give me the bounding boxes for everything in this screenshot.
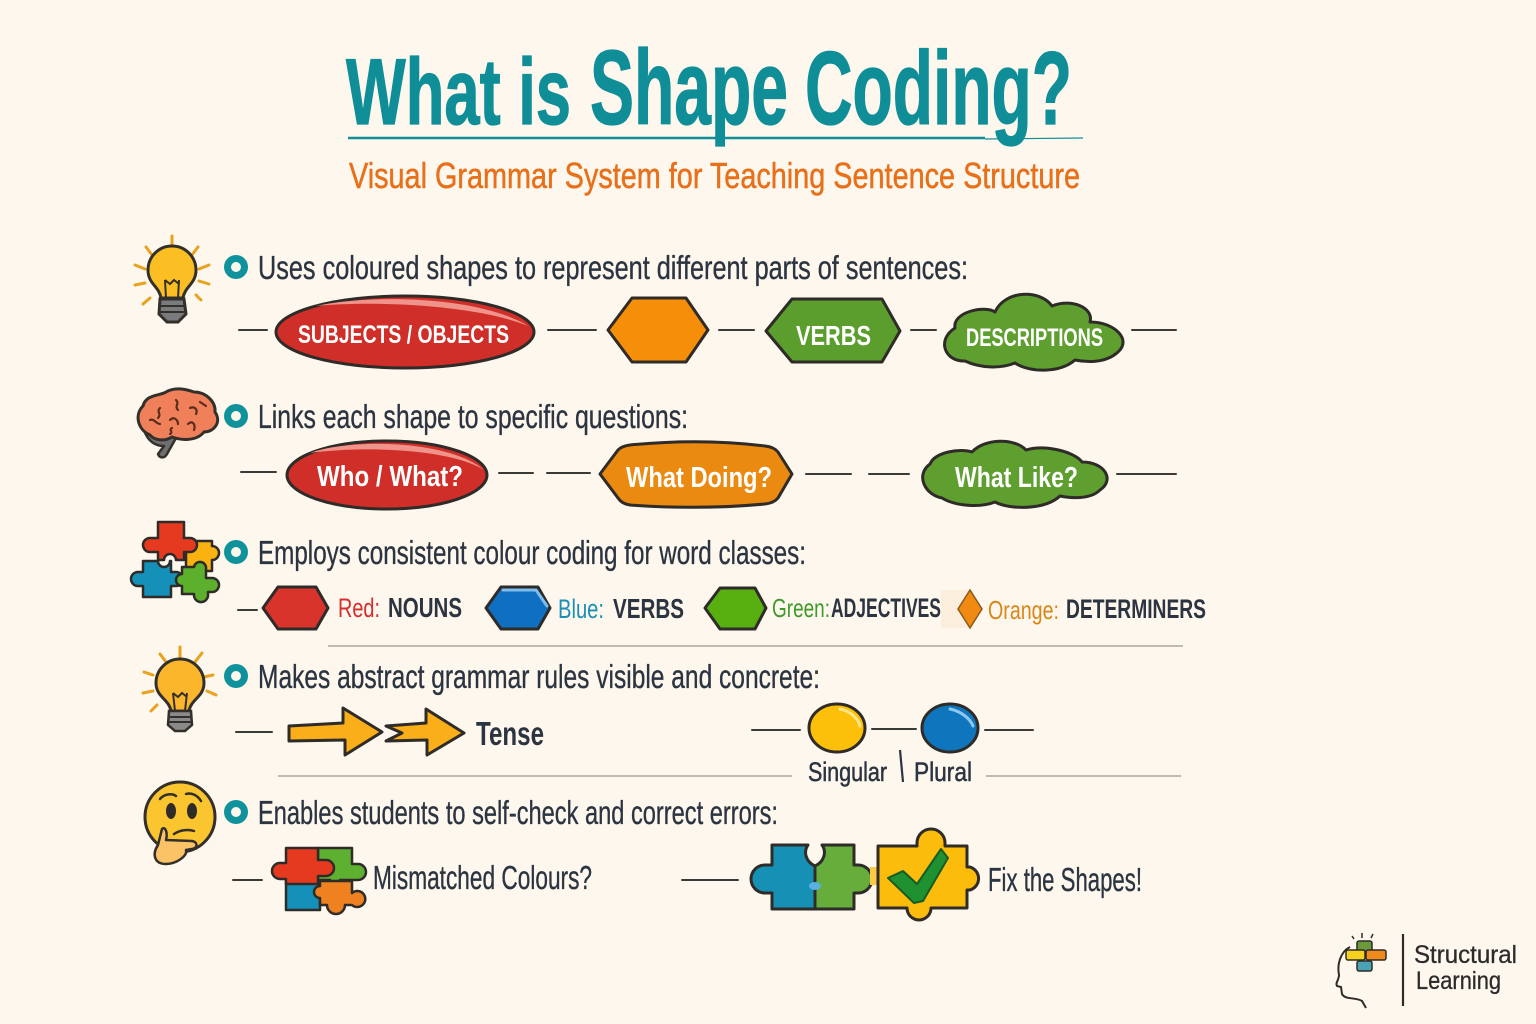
shape: what doing rounded hexagon [600,442,792,507]
panel: row 1 coloured shapes [135,236,1176,370]
legend: red nouns: Red: [338,593,380,623]
shape: verbs hexagon: VERBS [796,320,871,351]
shape: who / what oval: Who / What? [317,461,463,493]
title: Shape [590,29,788,147]
shape: descriptions cloud: DESCRIPTIONS [966,324,1103,352]
text: row 3 statement: Employs consistent colour coding for word classes: [258,534,806,571]
text: row 1 statement: Uses coloured shapes to represent different parts of sentences: [258,249,968,286]
panel: row 2 questions [138,389,1176,509]
shape: orange hexagon [608,298,708,362]
shape: what like cloud [923,441,1107,507]
title [346,29,1083,147]
text: singular and plural: Plural [914,757,972,787]
panel: row 3 colour coding [131,522,1206,646]
legend: green adjectives: Green: [772,593,830,623]
panel: row 5 self-check [145,782,1142,920]
shape: what doing rounded hexagon: What Doing? [626,462,772,494]
singular circle [809,704,865,752]
logo: Structural Learning [1336,933,1517,1008]
plural circle [922,704,978,752]
legend: blue verbs: VERBS [613,593,684,624]
logo: Structural Learning: Structural [1414,941,1517,969]
subtitle: Visual Grammar System for Teaching Sentence Structure [349,155,1080,196]
icon: yellow jigsaw with check mark [870,829,979,920]
shape: what like cloud: What Like? [955,462,1078,494]
text: tense: Tense [476,715,544,752]
icon: mismatched jigsaw [272,848,366,914]
icon: brain [138,389,218,457]
shape: descriptions cloud [945,294,1123,370]
legend: green adjectives: ADJECTIVES [831,593,941,623]
text: row 2 statement: Links each shape to specific questions: [258,398,688,435]
bullet [224,540,248,564]
panel: row 4 abstract rules [143,647,1181,787]
legend: orange determiners: DETERMINERS [1066,594,1206,624]
bullet [224,664,248,688]
title: What is [346,39,571,144]
text: singular and plural [808,750,972,787]
shape: subjects / objects oval: SUBJECTS / OBJECTS [298,321,509,349]
title: Coding? [805,31,1072,147]
text: singular and plural: Singular [808,757,887,787]
icon: light bulb [143,647,216,731]
text: fix the shapes: Fix the Shapes! [988,861,1142,898]
bullet [224,800,248,824]
bullet [224,404,248,428]
icon: joined jigsaw pieces [751,845,872,909]
text: row 5 statement: Enables students to self-check and correct errors: [258,794,778,831]
legend: green adjectives [705,588,941,629]
bullet [224,255,248,279]
legend: orange determiners [941,590,1206,628]
text: row 4 statement: Makes abstract grammar rules visible and concrete: [258,658,820,695]
legend: blue verbs [486,587,684,629]
icon: jigsaw pieces [131,522,219,602]
arrows: tense [289,708,464,755]
legend: red nouns [263,587,462,629]
logo: Structural Learning: Learning [1416,967,1501,995]
legend: blue verbs: Blue: [558,594,604,624]
icon: light bulb [135,236,209,322]
shape: verbs hexagon [766,299,900,362]
legend: orange determiners: Orange: [988,595,1059,625]
shape: who / what oval [287,441,487,509]
legend: red nouns: NOUNS [388,592,462,623]
logo icon: head with blocks [1336,933,1386,1008]
text: mismatched colours: Mismatched Colours? [373,859,592,896]
shape: subjects / objects oval [276,296,534,368]
icon: thinking face [145,782,215,864]
